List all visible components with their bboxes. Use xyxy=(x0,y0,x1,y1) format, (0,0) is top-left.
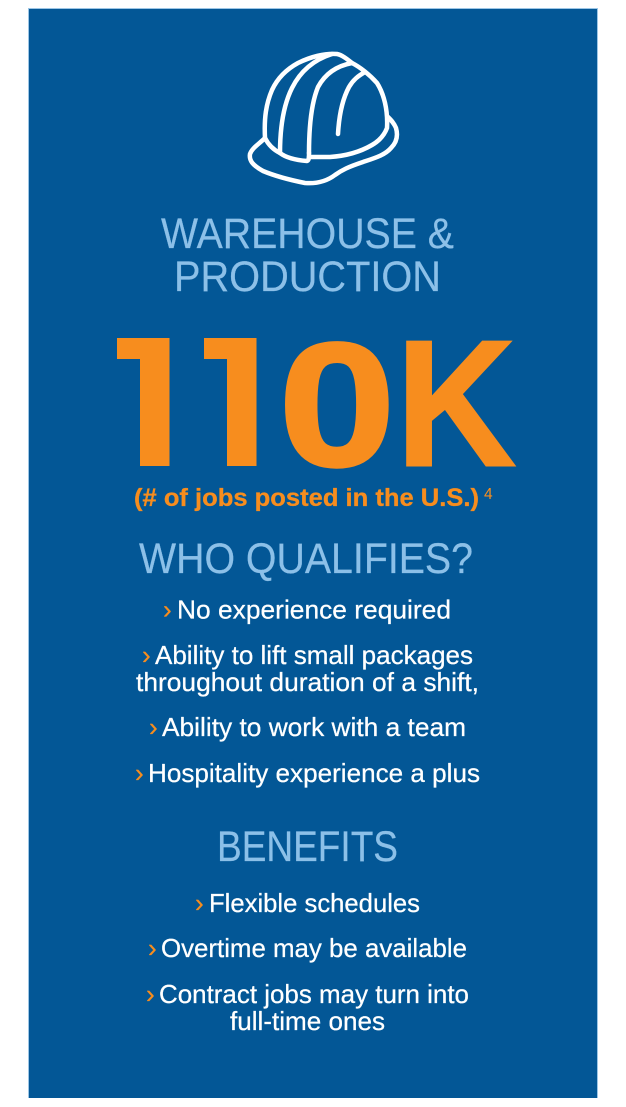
list: benefits: › xyxy=(195,888,204,918)
list: qualifications: › xyxy=(135,758,144,788)
list: benefits: Overtime may be available xyxy=(161,933,467,963)
big number: 110K: 1 xyxy=(96,299,176,506)
heading: warehouse and production: WAREHOUSE & xyxy=(161,210,454,258)
list: qualifications xyxy=(135,594,480,788)
list: qualifications: Ability to work with a team xyxy=(162,712,466,742)
list: benefits: Flexible schedules xyxy=(209,888,420,918)
icon: hard hat xyxy=(250,54,397,183)
big number: 110K: K xyxy=(396,304,516,504)
list: benefits: Contract jobs may turn into xyxy=(159,979,469,1009)
list: qualifications: No experience required xyxy=(177,594,451,624)
big number: 110K: 0 xyxy=(278,308,396,504)
list: benefits: › xyxy=(148,933,157,963)
heading: benefits: BENEFITS xyxy=(217,823,398,871)
heading: who qualifies: WHO QUALIFIES? xyxy=(139,535,473,583)
list: qualifications: › xyxy=(142,640,151,670)
caption: jobs posted: 4 xyxy=(484,486,493,503)
list: qualifications: throughout duration of a shift, xyxy=(136,667,479,697)
list: benefits: full-time ones xyxy=(230,1006,385,1036)
heading: warehouse and production: PRODUCTION xyxy=(174,253,441,301)
list: qualifications: › xyxy=(163,594,172,624)
list: qualifications: Ability to lift small packages xyxy=(155,640,473,670)
list: benefits xyxy=(146,888,469,1036)
big number: 110K xyxy=(96,299,516,506)
heading: warehouse and production xyxy=(161,210,454,301)
list: benefits: › xyxy=(146,979,155,1009)
list: qualifications: › xyxy=(149,712,158,742)
big number: 110K: 1 xyxy=(183,299,263,506)
list: qualifications: Hospitality experience a plus xyxy=(148,758,480,788)
caption: jobs posted: (# of jobs posted in the U.S.) xyxy=(134,484,479,512)
